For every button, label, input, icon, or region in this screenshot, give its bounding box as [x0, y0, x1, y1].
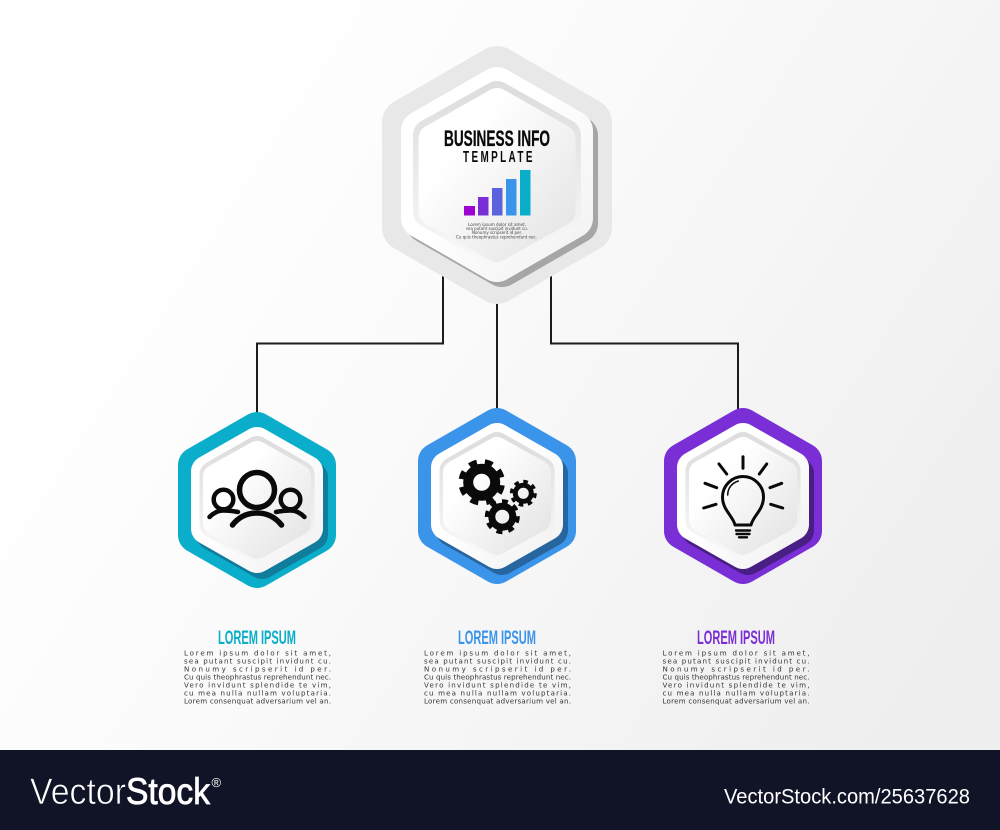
text block: central caption	[456, 222, 537, 240]
footer band	[0, 750, 1000, 830]
text block: central caption: Cu quis theophrastus reprehendunt nec.	[456, 234, 537, 240]
text block: central caption: sea putant suscipit invidunt cu.	[466, 226, 528, 231]
text block: central caption: Lorem ipsum dolor sit amet,	[468, 222, 526, 227]
heading: purple column: LOREM IPSUM	[697, 627, 775, 649]
panel: teal hexagon	[196, 430, 318, 570]
text block: central caption: Nonumy scripserit id per.	[472, 230, 522, 235]
text block: blue column: cu mea nulla nullam voluptaria.	[424, 688, 571, 698]
text block: purple column: sea putant suscipit invidunt cu.	[662, 656, 810, 666]
text block: teal column	[184, 648, 331, 706]
heading: blue column: LOREM IPSUM	[458, 627, 536, 649]
text block: blue column: Nonumy scripserit id per.	[424, 664, 571, 674]
text block: blue column: sea putant suscipit invidunt cu.	[424, 656, 571, 666]
icon: light bulb	[704, 457, 783, 537]
panel: purple hexagon	[682, 426, 804, 566]
text block: teal column: Nonumy scripserit id per.	[184, 664, 331, 674]
footer logo: Stock	[126, 770, 210, 812]
heading: template: TEMPLATE	[463, 148, 533, 166]
text block: blue column: Vero invidunt splendide te vim,	[424, 680, 571, 690]
footer image id: VectorStock.com/25637628	[724, 786, 970, 808]
heading: business info: BUSINESS INFO	[444, 126, 550, 151]
panel: central hexagon	[406, 70, 588, 280]
text block: blue column: Lorem consenquat adversarium vel an.	[424, 696, 571, 706]
text block: purple column: Lorem ipsum dolor sit amet,	[662, 648, 810, 658]
text block: blue column: Cu quis theophrastus reprehendunt nec.	[424, 672, 571, 682]
text block: purple column	[662, 648, 810, 706]
footer logo	[30, 770, 222, 812]
panel: blue hexagon	[436, 426, 558, 566]
text block: purple column: Nonumy scripserit id per.	[662, 664, 810, 674]
icon: gears	[459, 459, 535, 532]
icon: people	[210, 472, 304, 525]
text block: purple column: Vero invidunt splendide te vim,	[662, 680, 810, 690]
text block: blue column	[424, 648, 571, 706]
text block: teal column: Lorem ipsum dolor sit amet,	[184, 648, 331, 658]
connector lines	[257, 270, 738, 414]
text block: teal column: sea putant suscipit invidunt cu.	[184, 656, 331, 666]
footer logo: ®	[212, 775, 222, 790]
text block: blue column: Lorem ipsum dolor sit amet,	[424, 648, 571, 658]
text block: purple column: cu mea nulla nullam voluptaria.	[662, 688, 810, 698]
text block: teal column: Vero invidunt splendide te vim,	[184, 680, 331, 690]
heading: teal column: LOREM IPSUM	[218, 627, 296, 649]
text block: teal column: Cu quis theophrastus reprehendunt nec.	[184, 672, 331, 682]
text block: purple column: Cu quis theophrastus reprehendunt nec.	[662, 672, 810, 682]
footer logo: Vector	[30, 770, 126, 812]
text block: purple column: Lorem consenquat adversarium vel an.	[662, 696, 810, 706]
text block: teal column: Lorem consenquat adversarium vel an.	[184, 696, 331, 706]
bar chart	[464, 170, 530, 216]
text block: teal column: cu mea nulla nullam voluptaria.	[184, 688, 331, 698]
